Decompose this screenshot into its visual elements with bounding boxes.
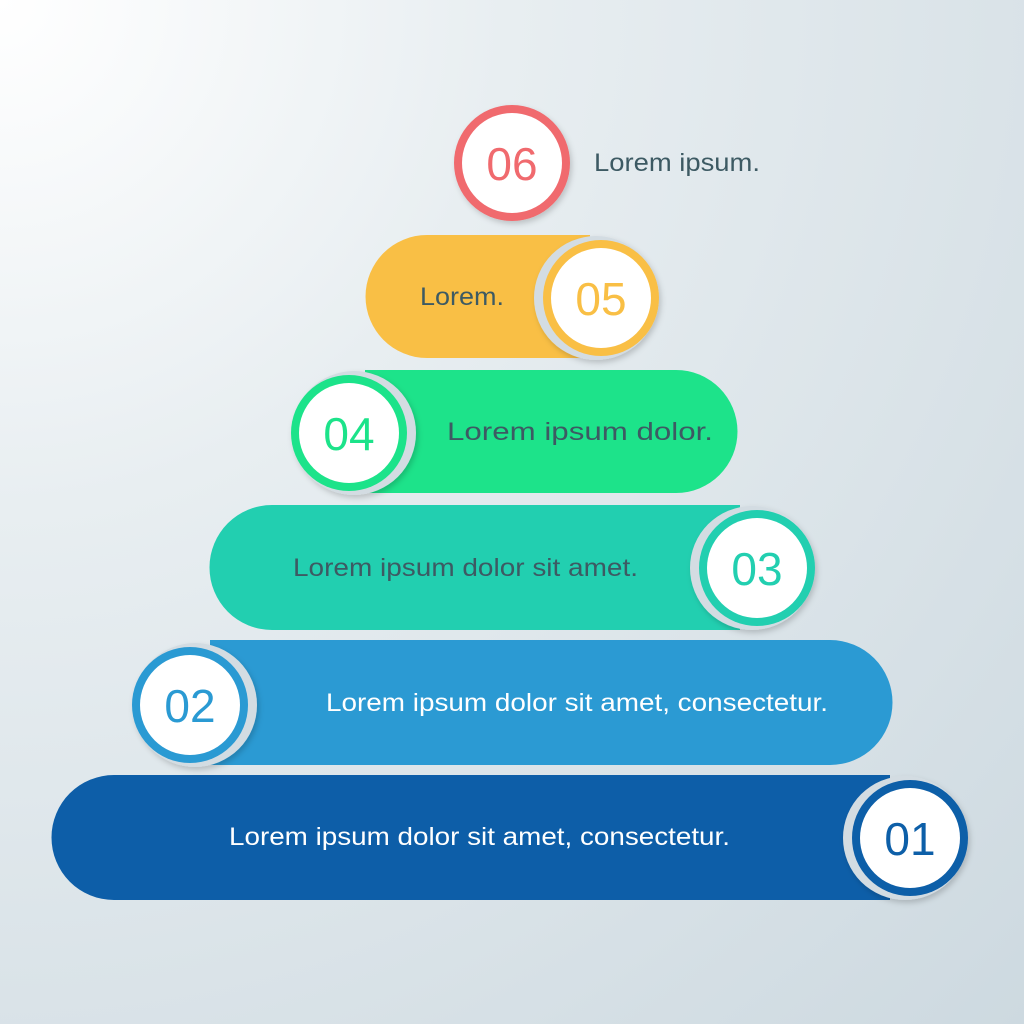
text 05: Lorem.	[420, 283, 504, 311]
text 03: Lorem ipsum dolor sit amet.	[293, 554, 638, 582]
text 06: Lorem ipsum.	[594, 149, 760, 177]
badge 05: 05	[575, 273, 627, 325]
badge 01: 01	[884, 813, 936, 865]
badge 03: 03	[731, 543, 783, 595]
bar 04	[365, 370, 738, 493]
badge 03	[690, 506, 815, 630]
bar 01	[52, 775, 890, 900]
tier 06	[454, 105, 760, 221]
badge 02: 02	[164, 680, 216, 732]
bar 05	[366, 235, 590, 358]
badge 02	[132, 643, 257, 767]
tier 02	[132, 640, 893, 767]
text 01: Lorem ipsum dolor sit amet, consectetur.	[229, 823, 730, 851]
text 04: Lorem ipsum dolor.	[447, 418, 713, 446]
badge 06: 06	[486, 138, 538, 190]
badge 04	[291, 371, 416, 495]
tier 01	[52, 775, 968, 900]
tier 03	[210, 505, 815, 630]
bar 03	[210, 505, 740, 630]
text 02: Lorem ipsum dolor sit amet, consectetur.	[326, 689, 828, 717]
tier 04	[291, 370, 738, 495]
badge 05	[534, 236, 659, 360]
badge 01	[843, 776, 968, 900]
tier 05	[366, 235, 659, 360]
bar 02	[210, 640, 893, 765]
badge 04: 04	[323, 408, 375, 460]
badge 06	[454, 105, 570, 221]
